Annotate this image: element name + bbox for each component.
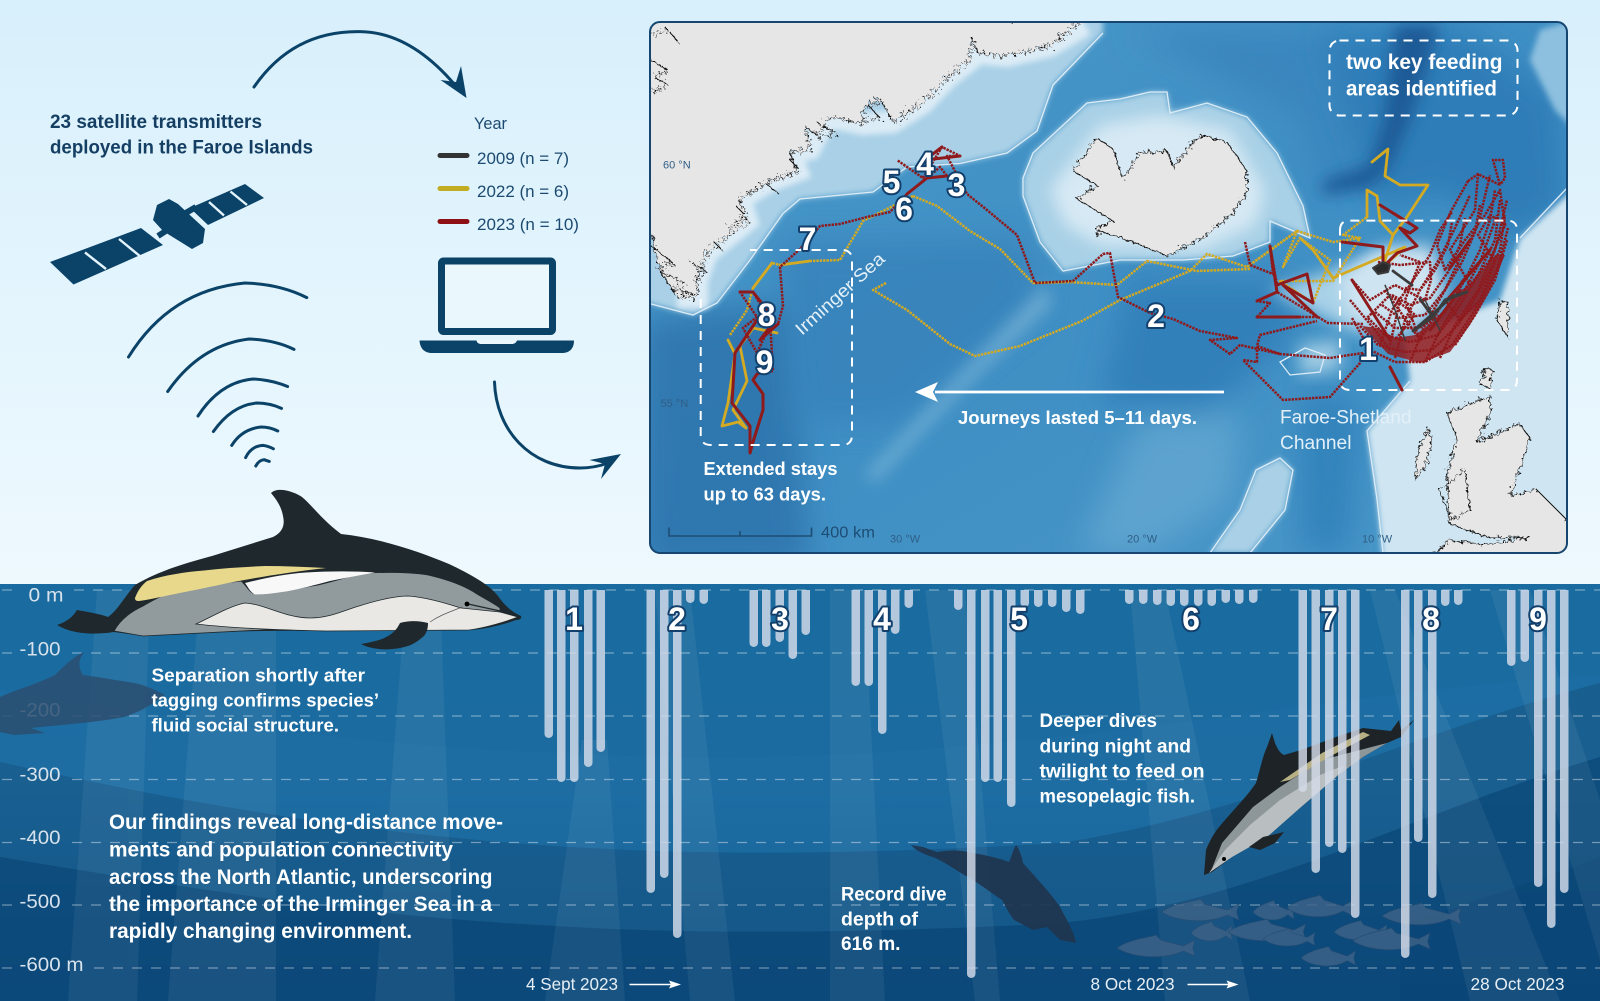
map: Faroe-Shetland Channel label bbox=[1281, 410, 1410, 449]
map: ocean base bbox=[650, 22, 1567, 553]
depth axis labels: -500 bbox=[20, 892, 60, 913]
map: Irminger Sea label: Irminger Sea bbox=[791, 248, 889, 339]
arrow: laptop to map bbox=[494, 382, 621, 479]
text: deeper dives: mesopelagic fish. bbox=[1040, 786, 1195, 808]
map: axis labels: 60 °N bbox=[663, 160, 691, 172]
depth axis labels bbox=[20, 586, 84, 976]
map: Extended stays note bbox=[704, 458, 838, 504]
dive series 8 bbox=[1401, 584, 1462, 958]
map: Scotland and islands bbox=[1415, 300, 1570, 556]
map: axis labels bbox=[660, 160, 1393, 546]
dive series numbers: 4 bbox=[873, 601, 891, 637]
map: Faroe-Shetland dashed area bbox=[1340, 221, 1517, 390]
timeline: 8 Oct 2023: 8 Oct 2023 bbox=[1090, 974, 1174, 994]
map: route numbers: 7 bbox=[799, 221, 816, 257]
map panel bbox=[640, 10, 1575, 570]
timeline: 28 Oct 2023: 28 Oct 2023 bbox=[1470, 974, 1564, 994]
timeline: 4 Sept 2023 bbox=[526, 974, 681, 994]
legend: year: Year bbox=[474, 114, 507, 133]
dive series 7 bbox=[1298, 584, 1360, 918]
map: 2022 tracks (yellow) bbox=[722, 149, 1428, 428]
main dolphin at the surface bbox=[57, 490, 521, 649]
icon: laptop bbox=[420, 261, 574, 353]
text: transmitters deployed bbox=[50, 111, 313, 158]
map: scale bar bbox=[668, 526, 874, 538]
map: axis labels: 10 °W bbox=[1362, 534, 1393, 546]
depth axis labels: 0 m bbox=[28, 586, 64, 606]
dive series numbers: 6 bbox=[1182, 601, 1200, 637]
text: record dive bbox=[841, 884, 947, 955]
map: feeding areas callout: two key feeding bbox=[1346, 51, 1502, 74]
map: axis labels: 55 °N bbox=[660, 398, 688, 410]
depth axis labels: -400 bbox=[20, 828, 60, 849]
dive series numbers: 1 bbox=[565, 601, 583, 637]
map: axis labels: 30 °W bbox=[890, 534, 921, 546]
legend: year bbox=[440, 114, 579, 234]
dive series numbers bbox=[565, 601, 1547, 637]
text: separation note: tagging confirms species’ bbox=[152, 690, 379, 710]
map: Irminger dashed area bbox=[701, 250, 852, 445]
depth grid lines bbox=[2, 590, 1600, 968]
map: route numbers: 5 bbox=[883, 164, 900, 200]
depth axis labels: -100 bbox=[20, 640, 60, 660]
dive series 1 bbox=[544, 584, 605, 782]
map: Greenland land bbox=[640, 18, 1085, 297]
map: feeding areas callout bbox=[1330, 40, 1518, 116]
dive series numbers: 9 bbox=[1529, 601, 1547, 637]
map: Faroe plateau and banks bbox=[1210, 245, 1445, 553]
text: deeper dives bbox=[1040, 710, 1204, 808]
text: findings summary: rapidly changing environment. bbox=[109, 919, 412, 943]
legend: year: 2009 (n = 7) bbox=[477, 149, 569, 168]
map: Iceland land bbox=[1073, 135, 1247, 256]
dive series 2 bbox=[646, 584, 708, 938]
water panel bbox=[0, 584, 1600, 1001]
text: separation note: fluid social structure. bbox=[152, 714, 339, 736]
text: deeper dives: Deeper dives bbox=[1040, 710, 1157, 732]
dive series 3 bbox=[750, 584, 810, 659]
map: route numbers: 9 bbox=[756, 344, 773, 380]
dive series 9 bbox=[1507, 584, 1568, 928]
text: deeper dives: twilight to feed on bbox=[1040, 760, 1204, 782]
dive series 6 bbox=[1125, 584, 1258, 606]
text: transmitters deployed: deployed in the Faroe Islands bbox=[50, 136, 313, 158]
water: depth layers bbox=[0, 675, 1600, 1001]
map: scale bar: 400 km bbox=[821, 524, 875, 542]
map: journey duration note: Journeys lasted 5–11 days. bbox=[958, 407, 1197, 428]
dive profiles bbox=[544, 584, 1568, 978]
text: findings summary: the importance of the Irminger Sea in a bbox=[109, 892, 493, 916]
text: findings summary: ments and population connectivity bbox=[109, 838, 453, 862]
map: route numbers bbox=[756, 146, 1377, 380]
timeline: 4 Sept 2023: 4 Sept 2023 bbox=[526, 974, 618, 994]
sky background bbox=[0, 0, 1600, 584]
map: bathymetry shading bbox=[640, 20, 1575, 570]
dive series numbers: 5 bbox=[1010, 601, 1028, 637]
map: journey arrow bbox=[915, 382, 1224, 402]
icon: signal waves bbox=[128, 283, 307, 466]
dark dolphin descending bbox=[911, 845, 1076, 943]
dive series numbers: 2 bbox=[668, 601, 686, 637]
map: Greenland coast details bbox=[650, 30, 880, 294]
map: Iceland shelf bbox=[1023, 92, 1310, 271]
text: record dive: 616 m. bbox=[841, 933, 900, 955]
text: record dive: Record dive bbox=[841, 884, 947, 906]
map: feeding areas callout: areas identified bbox=[1346, 78, 1497, 100]
map: Scotland shelf bbox=[1367, 188, 1575, 560]
fish school bbox=[1117, 895, 1461, 966]
text: transmitters deployed: 23 satellite transmitters bbox=[50, 111, 262, 133]
depth axis labels: -600 m bbox=[20, 955, 84, 976]
map: route numbers: 4 bbox=[916, 146, 934, 182]
map: route numbers: 8 bbox=[758, 297, 775, 333]
timeline: 8 Oct 2023 bbox=[1090, 974, 1238, 994]
dive series numbers: 3 bbox=[771, 601, 789, 637]
map: Greenland shelf bbox=[640, 10, 1103, 315]
map: route numbers: 2 bbox=[1147, 298, 1165, 334]
text: findings summary: Our findings reveal long-distance move- bbox=[109, 810, 503, 834]
map: 2009 tracks (dark) bbox=[1373, 262, 1467, 340]
map: 2023 tracks (red) bbox=[732, 147, 1508, 453]
dive series numbers: 8 bbox=[1422, 601, 1440, 637]
text: deeper dives: during night and bbox=[1040, 736, 1191, 758]
dive series numbers: 7 bbox=[1320, 601, 1338, 637]
map: route numbers: 1 bbox=[1359, 331, 1377, 367]
text: record dive: depth of bbox=[841, 908, 918, 930]
water: light rays bbox=[68, 590, 1600, 1001]
dive series 5 bbox=[954, 584, 1084, 978]
map: Extended stays note: up to 63 days. bbox=[704, 484, 826, 504]
depth axis labels: -300 bbox=[20, 765, 60, 786]
map: route numbers: 6 bbox=[895, 191, 913, 227]
dive series 4 bbox=[852, 584, 913, 734]
map: Extended stays note: Extended stays bbox=[704, 458, 838, 479]
shadow dolphin, left bbox=[0, 652, 165, 735]
arrow: transmitters to laptop bbox=[254, 32, 466, 98]
legend: year: 2022 (n = 6) bbox=[477, 182, 569, 201]
map: route numbers: 3 bbox=[948, 167, 965, 203]
map: axis labels: 20 °W bbox=[1127, 534, 1158, 546]
text: findings summary bbox=[109, 810, 503, 943]
map: Faroe-Shetland Channel label: Faroe-Shetland bbox=[1280, 408, 1412, 428]
depth axis labels: -200 bbox=[20, 700, 60, 722]
icon: satellite bbox=[50, 184, 264, 284]
text: findings summary: across the North Atlantic, underscoring bbox=[109, 865, 492, 889]
text: separation note: Separation shortly after bbox=[152, 664, 365, 686]
dolphin diving, right bbox=[1204, 720, 1414, 875]
map: Faroe-Shetland Channel label: Channel bbox=[1280, 433, 1352, 454]
legend: year: 2023 (n = 10) bbox=[477, 215, 579, 234]
map: Iceland shelf lighter area bbox=[1050, 115, 1265, 250]
text: separation note bbox=[152, 664, 379, 736]
